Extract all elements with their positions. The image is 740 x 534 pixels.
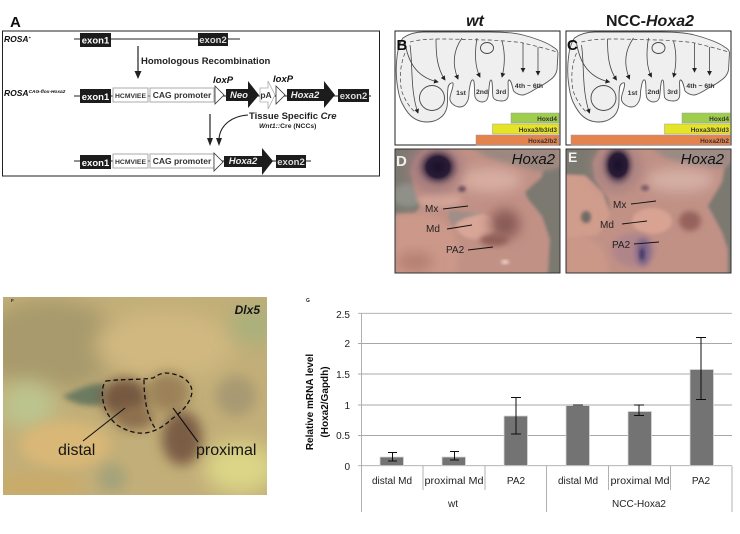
y axis tick labels: 0.5 [336,431,350,442]
dashed outline of distal and proximal regions [102,373,192,433]
arch labels [456,83,543,97]
anatomical labels: PA2 [612,240,631,251]
row: recombined allele: exon1 [82,158,110,169]
y axis tick labels: 0 [344,462,350,473]
arch labels: 2nd [476,89,488,96]
panel label A: A [10,14,21,31]
row: recombined allele [74,148,311,175]
panel G: relative mRNA bar chart [305,298,732,512]
Hox expression bars [476,113,559,145]
arch labels: 2nd [647,89,660,96]
Hox expression bars: Hoxd4 [709,116,729,123]
dashed neural tube line [400,39,557,112]
gene label Dlx5: Dlx5 [235,303,260,317]
arrow: homologous recombination: Homologous Recombination [141,56,270,67]
row: recombined allele: HCMVIEE [115,159,146,166]
category labels: distal Md [558,476,598,487]
row: ROSA+ allele [4,33,240,47]
panel B: wt pharyngeal arch diagram [395,31,560,145]
category labels: NCC-Hoxa2 [612,499,666,510]
y axis tick labels: 1.5 [336,370,350,381]
row: ROSA CAG-flox-Hoxa2 allele: loxP [213,75,234,86]
panel label F: F [11,298,14,303]
arrows: Cre recombination [207,111,337,146]
dashed neural tube line [572,39,728,112]
category labels [372,476,711,510]
y axis tick labels: 2.5 [336,310,350,321]
Hox expression bars: Hoxd4 [537,116,557,123]
row: ROSA+ allele: ROSA [4,34,29,44]
row: ROSA CAG-flox-Hoxa2 allele: CAG promoter [153,90,212,100]
arch labels: 1st [456,90,467,97]
y axis title: Relative mRNA level [305,354,316,450]
anatomical labels: Md [600,220,614,231]
row: ROSA CAG-flox-Hoxa2 allele: loxP [273,74,294,85]
arch labels: 1st [628,90,638,97]
panel C: NCC-Hoxa2 pharyngeal arch diagram [566,31,731,145]
anatomical labels [425,204,493,256]
row: ROSA CAG-flox-Hoxa2 allele: exon2 [340,91,367,102]
y axis tick labels: 2 [344,339,350,350]
arrow: homologous recombination [134,46,270,79]
row: ROSA CAG-flox-Hoxa2 allele [4,74,371,109]
row: ROSA+ allele: exon2 [199,35,227,46]
column heading: NCC-Hoxa2: NCC-Hoxa2 [606,13,694,30]
y axis title line 2: (Hoxa2/Gapdh) [320,366,331,438]
row: recombined allele: CAG promoter [153,156,212,166]
y axis tick labels: 1 [344,401,350,412]
panel label G: G [306,298,310,304]
panel A: gene targeting construct [2,14,380,176]
anatomical labels: Md [426,224,440,235]
arch labels: 3rd [496,89,506,96]
category labels: PA2 [692,476,711,487]
gene label Hoxa2: Hoxa2 [512,151,556,168]
Hox expression bars: Hoxa2/b2 [528,138,557,145]
row: ROSA CAG-flox-Hoxa2 allele: ROSA [4,88,29,98]
anatomical labels [600,200,659,251]
arch labels: 4th ~ 6th [686,83,715,90]
arch labels [628,83,715,97]
row: ROSA CAG-flox-Hoxa2 allele: pA [260,90,272,100]
arch labels: 3rd [667,89,678,96]
embryo outline [396,32,558,122]
category labels: proximal Md [610,476,670,487]
grid lines [358,313,732,512]
migration arrows [576,38,710,113]
eye and otic circles [591,42,665,110]
panel label E: E [568,149,577,165]
bars [380,370,714,466]
Hox expression bars: Hoxa3/b3/d3 [519,127,557,134]
arrows: Cre recombination: Wnt1::Cre (NCCs) [259,123,316,130]
anatomical labels: Mx [425,204,438,215]
panel D: wt embryo photo [392,143,560,276]
arch labels: 4th ~ 6th [515,83,543,90]
y axis tick labels [336,310,350,473]
callout: distal: distal [58,442,95,459]
Hox expression bars: Hoxa2/b2 [700,138,729,145]
callout: distal [58,408,125,459]
gene label Hoxa2: Hoxa2 [681,151,725,168]
arrows: Cre recombination: Tissue Specific Cre [249,111,337,122]
row: ROSA+ allele: exon1 [82,36,110,46]
row: ROSA CAG-flox-Hoxa2 allele: exon1 [82,92,110,103]
panel label D: D [396,153,407,170]
panel F: Dlx5 photo [0,297,281,499]
row: ROSA CAG-flox-Hoxa2 allele: Neo [230,90,248,101]
callout: proximal: proximal [196,442,256,459]
column heading: wt: wt [466,13,485,30]
Hox expression bars [571,113,730,145]
construct frame [2,31,380,176]
row: ROSA CAG-flox-Hoxa2 allele: CAG-flox-Hoxa2 [29,89,66,95]
row: ROSA CAG-flox-Hoxa2 allele: HCMVIEE [115,93,146,100]
Hox expression bars: Hoxa3/b3/d3 [691,127,729,134]
callout: proximal [173,408,256,459]
category labels: distal Md [372,476,412,487]
anatomical labels: Mx [613,200,626,211]
category labels: PA2 [507,476,526,487]
migration arrows [405,38,538,113]
error bars [388,338,706,461]
panel E: NCC-Hoxa2 embryo photo [566,142,731,276]
row: recombined allele: exon2 [277,157,305,168]
row: recombined allele: Hoxa2 [229,156,258,167]
row: ROSA+ allele: + [29,35,32,40]
panel label B: B [396,37,408,54]
eye and otic circles [420,42,494,110]
category labels: wt [447,499,458,510]
embryo outline [568,32,730,122]
category labels: proximal Md [424,476,484,487]
anatomical labels: PA2 [446,245,465,256]
panel label C: C [567,37,578,54]
row: ROSA CAG-flox-Hoxa2 allele: Hoxa2 [291,90,320,101]
